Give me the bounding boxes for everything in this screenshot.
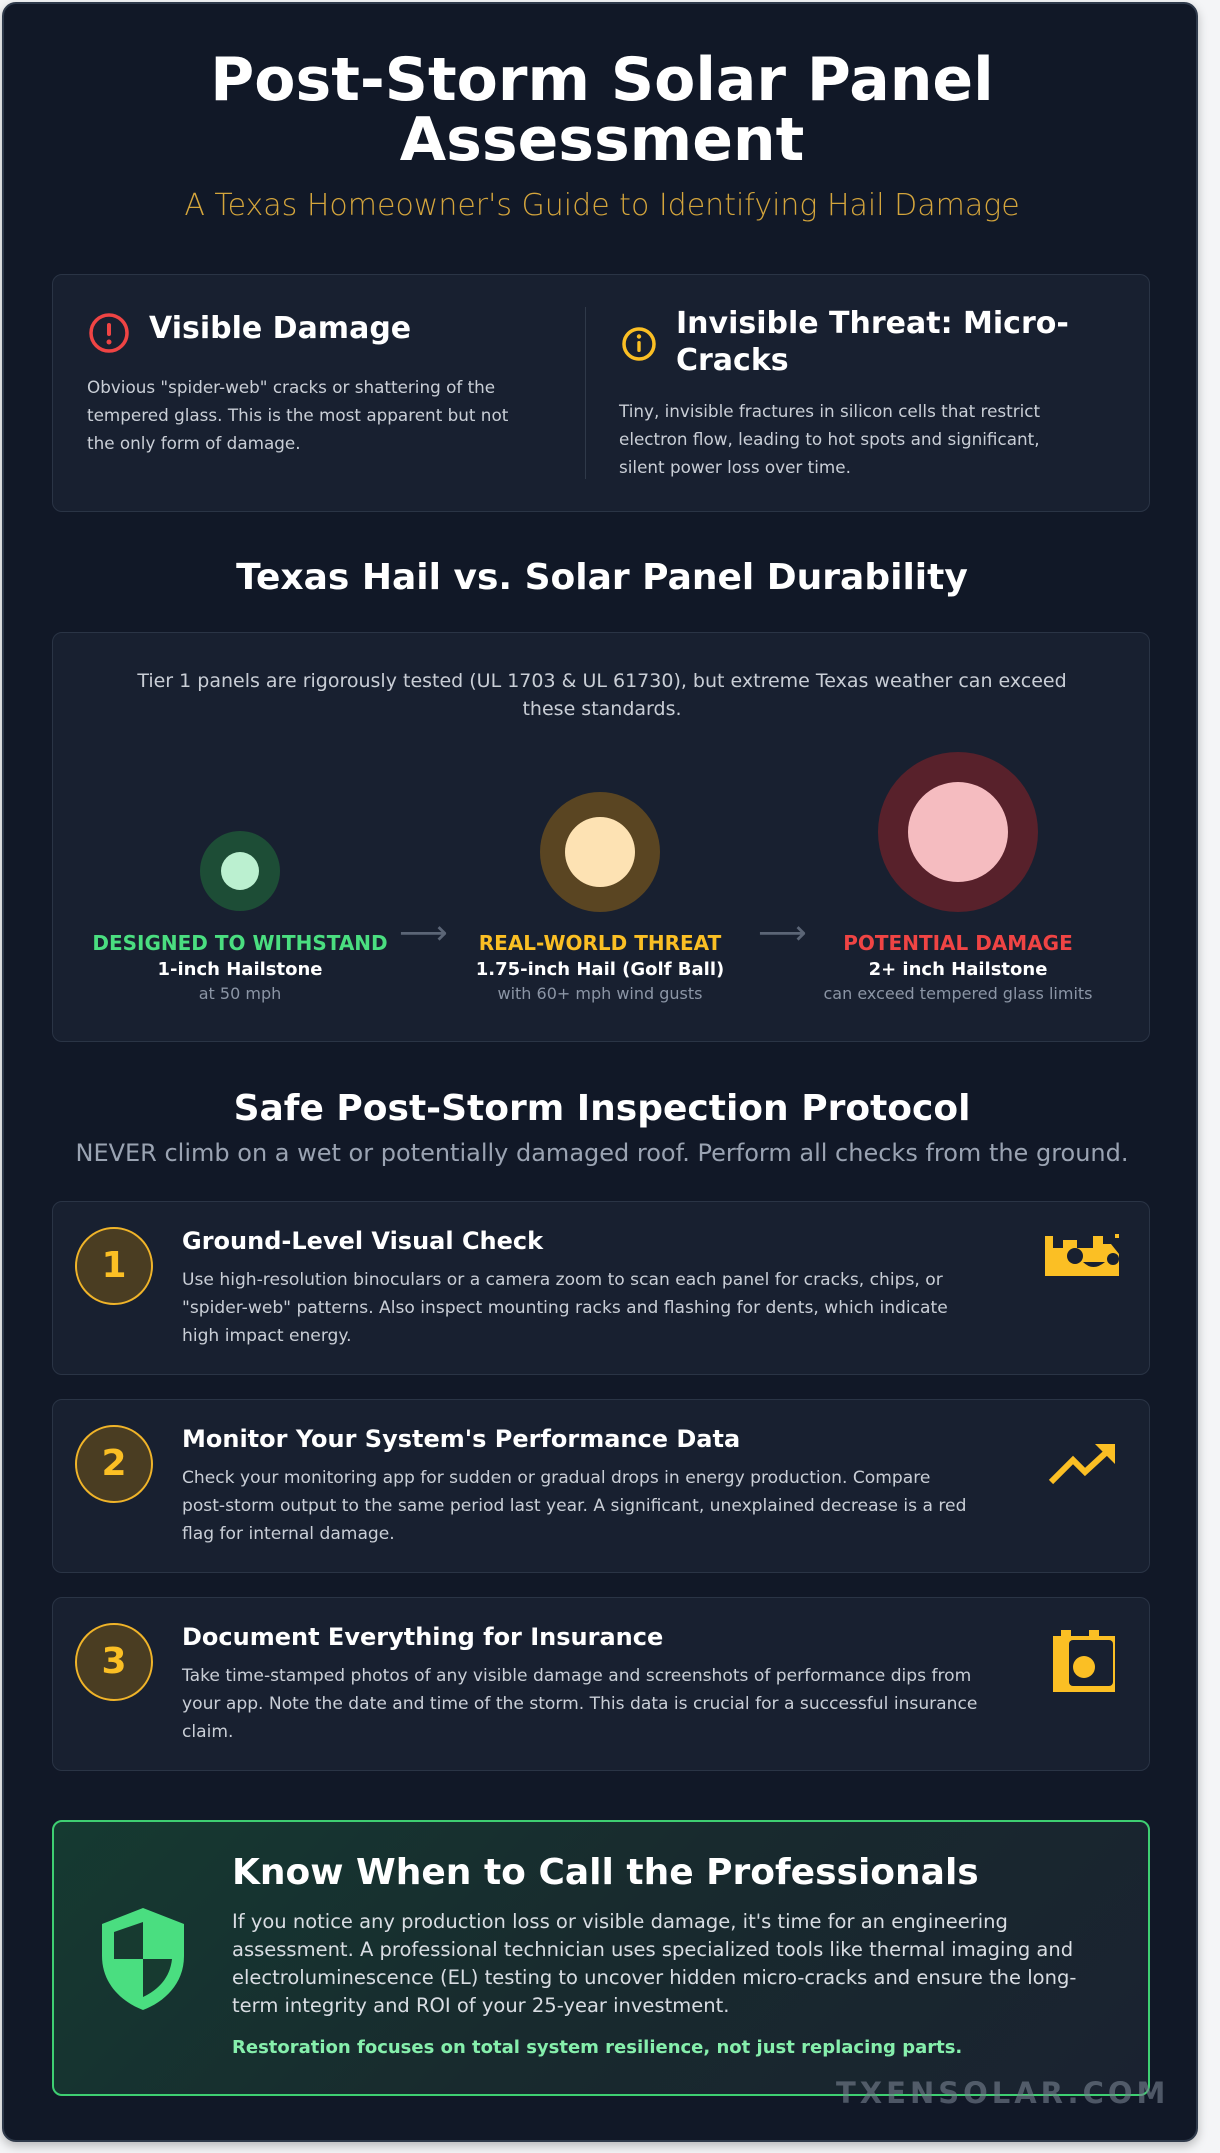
icon: golf ball hailstone bbox=[540, 792, 660, 912]
step 1 text: Use high-resolution binoculars or a camera zoom to scan each panel for cracks, chips, or bbox=[182, 1270, 943, 1290]
arrow: ⟶ bbox=[399, 913, 448, 953]
text: intro: Tier 1 panels are rigorously tested (UL 1703 & UL 61730), but extreme Texas weather can exceed these standards. bbox=[137, 670, 1067, 720]
label: designed to withstand: 1-inch Hailstone bbox=[158, 959, 322, 980]
label: potential damage bbox=[823, 931, 1092, 1003]
label: real-world threat: 1.75-inch Hail (Golf Ball) bbox=[476, 959, 724, 980]
number 2: 2 bbox=[101, 1443, 127, 1484]
icon: trending up bbox=[1048, 1444, 1115, 1484]
icon: binoculars bbox=[1045, 1234, 1119, 1276]
heading: hail vs durability: Texas Hail vs. Solar Panel Durability bbox=[236, 557, 968, 598]
number 2 bbox=[75, 1425, 153, 1503]
label: designed to withstand: DESIGNED TO WITHSTAND bbox=[92, 931, 388, 955]
icon: camera bbox=[1053, 1630, 1115, 1692]
step 3 text: your app. Note the date and time of the storm. This data is crucial for a successful insurance bbox=[182, 1694, 977, 1714]
step 1 card bbox=[52, 1201, 1150, 1375]
step 3 card bbox=[52, 1597, 1150, 1771]
number 3: 3 bbox=[101, 1641, 127, 1682]
step 1 text: high impact energy. bbox=[182, 1326, 352, 1346]
label: designed to withstand bbox=[92, 931, 388, 1003]
step 2 text: Check your monitoring app for sudden or gradual drops in energy production. Compare bbox=[182, 1468, 930, 1488]
heading: visible damage: Visible Damage bbox=[149, 311, 411, 346]
icon: red alert bbox=[89, 313, 129, 353]
step 1 title: Ground-Level Visual Check bbox=[182, 1227, 543, 1255]
title bbox=[210, 45, 994, 175]
step 2 text: post-storm output to the same period last year. A significant, unexplained decrease is a red bbox=[182, 1496, 966, 1516]
text: visible damage: Obvious "spider-web" cracks or shattering of the tempered glass. This is the most apparent but not the only form of damage. bbox=[87, 377, 508, 453]
watermark: TXENSOLAR.COM bbox=[836, 2076, 1169, 2110]
icon: 1-inch hailstone bbox=[200, 831, 280, 911]
number 1 bbox=[75, 1227, 153, 1305]
step 1 text: "spider-web" patterns. Also inspect mounting racks and flashing for dents, which indicate bbox=[182, 1298, 948, 1318]
label: potential damage: POTENTIAL DAMAGE bbox=[843, 931, 1073, 955]
cta title: Know When to Call the Professionals bbox=[232, 1852, 979, 1893]
label: real-world threat: with 60+ mph wind gusts bbox=[497, 984, 702, 1003]
panel: hail comparison bbox=[52, 632, 1150, 1042]
panel: call the professionals bbox=[52, 1820, 1150, 2096]
step 3 text: claim. bbox=[182, 1722, 233, 1742]
step 2 title: Monitor Your System's Performance Data bbox=[182, 1425, 740, 1453]
step 1 text bbox=[182, 1270, 948, 1346]
step 2 text bbox=[182, 1468, 966, 1544]
label: real-world threat bbox=[476, 931, 724, 1003]
title: Assessment bbox=[400, 105, 804, 175]
step 3 text bbox=[182, 1666, 977, 1742]
icon: shield bbox=[102, 1908, 184, 2010]
label: potential damage: can exceed tempered glass limits bbox=[823, 984, 1092, 1003]
step 3 text: Take time-stamped photos of any visible damage and screenshots of performance dips from bbox=[182, 1666, 971, 1686]
step 3 title: Document Everything for Insurance bbox=[182, 1623, 663, 1651]
icon: yellow info bbox=[622, 327, 656, 361]
subtitle: warning: NEVER climb on a wet or potentially damaged roof. Perform all checks from the ground. bbox=[75, 1139, 1128, 1167]
step 2 text: flag for internal damage. bbox=[182, 1524, 395, 1544]
title: Post-Storm Solar Panel bbox=[210, 45, 994, 115]
cta text: If you notice any production loss or visible damage, it's time for an engineering assessment. A professional technician uses specialized tools like thermal imaging and electroluminescence (EL) testing to uncover hidden micro-cracks and ensure the long-term integrity and ROI of your 25-year investment. bbox=[232, 1910, 1076, 2017]
label: real-world threat: REAL-WORLD THREAT bbox=[479, 931, 721, 955]
step 2 card bbox=[52, 1399, 1150, 1573]
subtitle: A Texas Homeowner's Guide to Identifying Hail Damage bbox=[184, 188, 1020, 223]
panel: damage types bbox=[52, 274, 1150, 512]
number 1: 1 bbox=[101, 1245, 127, 1286]
text: micro-cracks: Tiny, invisible fractures in silicon cells that restrict electron flow, leading to hot spots and significant, silent power loss over time. bbox=[619, 401, 1040, 477]
arrow: ⟶ bbox=[758, 913, 807, 953]
icon: 2-inch hailstone bbox=[878, 752, 1038, 912]
number 3 bbox=[75, 1623, 153, 1701]
heading: invisible threat: Invisible Threat: Micro-Cracks bbox=[676, 306, 1069, 378]
cta highlight: Restoration focuses on total system resilience, not just replacing parts. bbox=[232, 2037, 962, 2058]
label: designed to withstand: at 50 mph bbox=[199, 984, 281, 1003]
label: potential damage: 2+ inch Hailstone bbox=[869, 959, 1047, 980]
heading: inspection protocol: Safe Post-Storm Inspection Protocol bbox=[234, 1088, 970, 1129]
